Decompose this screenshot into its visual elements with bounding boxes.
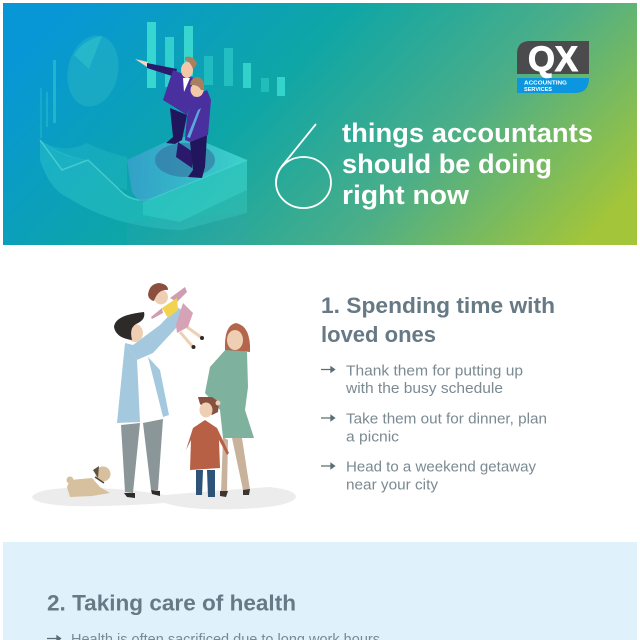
bullet 3: near your city xyxy=(346,478,439,494)
heading: loved ones xyxy=(321,322,436,347)
bullet list xyxy=(321,364,547,494)
big numeral 6 xyxy=(276,124,331,208)
title text: things accountants xyxy=(342,118,593,148)
title text: right now xyxy=(342,180,470,210)
logo: QX Accounting Services: SERVICES xyxy=(524,87,552,93)
heading xyxy=(321,293,555,347)
illustration: isometric data dashboard xyxy=(40,22,285,245)
bullet 2: Take them out for dinner, plan xyxy=(346,412,547,428)
father xyxy=(114,307,185,498)
logo: QX Accounting Services: ACCOUNTING xyxy=(524,80,567,86)
heading: 1. Spending time with xyxy=(321,293,555,318)
bullet 2: a picnic xyxy=(346,430,399,446)
panel background xyxy=(3,542,637,640)
mother xyxy=(205,323,254,497)
logo: QX Accounting Services xyxy=(517,40,589,93)
bullet 2 xyxy=(321,412,547,446)
bullet 1 xyxy=(321,364,523,397)
title text: should be doing xyxy=(342,149,552,179)
bullet 1: with the busy schedule xyxy=(345,381,503,397)
bullet 3: Head to a weekend getaway xyxy=(346,460,537,476)
panel: 1. spending time with loved ones xyxy=(32,283,555,509)
logo: QX Accounting Services: QX xyxy=(528,40,579,79)
child lifted xyxy=(148,283,204,349)
son xyxy=(186,397,229,497)
title text xyxy=(342,118,593,210)
chart: pie hologram xyxy=(61,31,125,111)
ground shadow xyxy=(32,487,296,509)
figure: man pointing xyxy=(135,57,197,144)
panel: header banner xyxy=(3,3,637,245)
isometric platform xyxy=(127,136,247,222)
dog xyxy=(66,466,110,497)
panel: 2. taking care of health xyxy=(3,542,637,640)
curved translucent data band xyxy=(40,60,247,245)
figure: second man with briefcase xyxy=(176,77,211,178)
illustration: family xyxy=(32,283,296,509)
banner gradient background xyxy=(3,3,637,245)
bullet 1: Thank them for putting up xyxy=(346,364,523,380)
heading: 2. Taking care of health xyxy=(47,590,296,616)
chart: floating bars xyxy=(147,22,285,96)
bullet 3 xyxy=(321,460,537,494)
